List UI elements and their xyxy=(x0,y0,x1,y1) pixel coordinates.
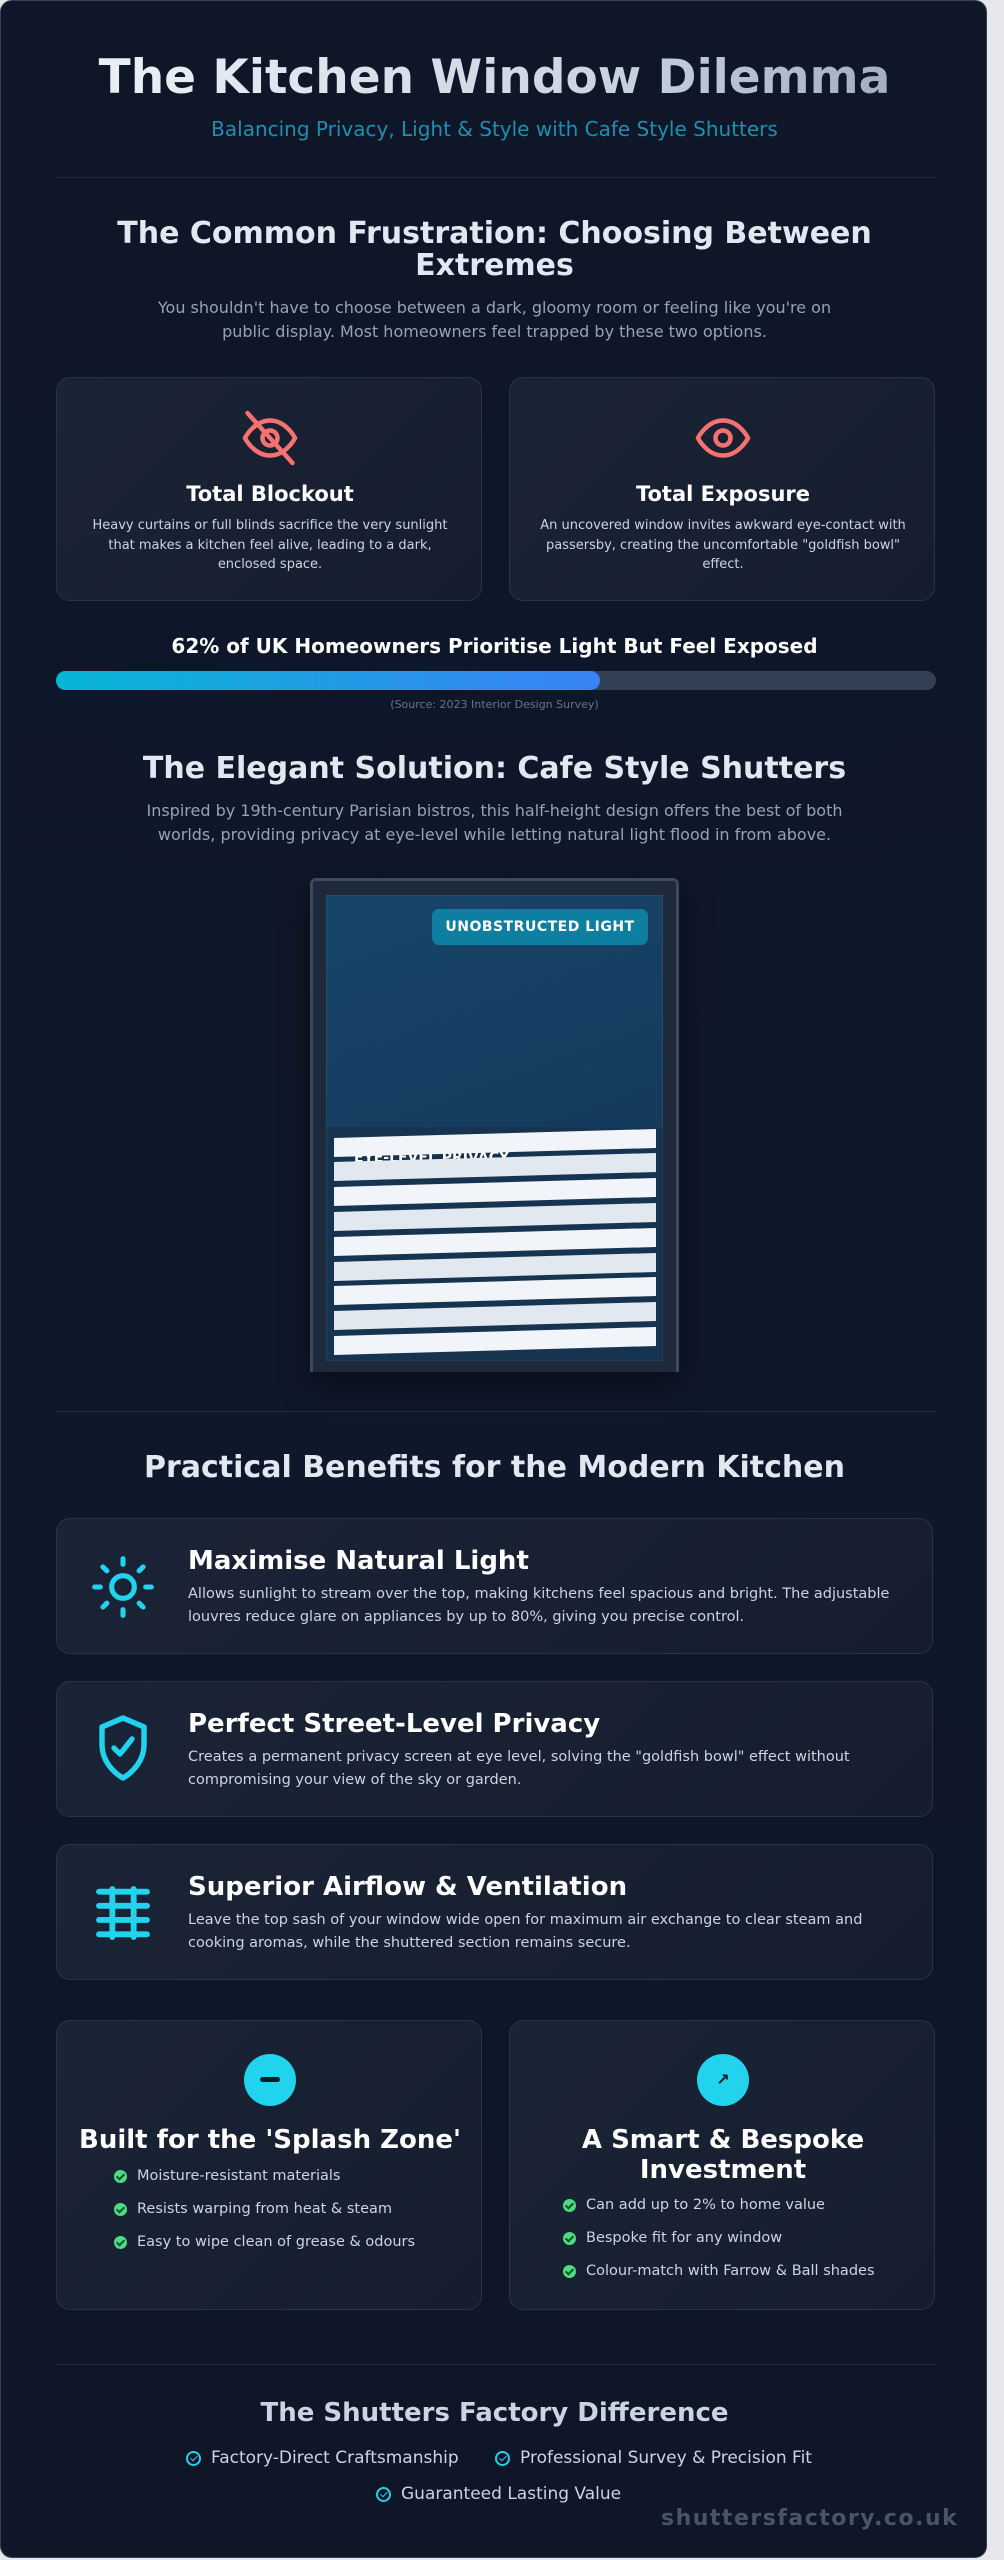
heading: common frustration: The Common Frustration: Choosing Between Extremes xyxy=(117,216,872,283)
checklist: Moisture-resistant materials xyxy=(137,2168,340,2184)
icon: grille xyxy=(96,1886,150,1940)
intro paragraph: You shouldn't have to choose between a dark, gloomy room or feeling like you're on public display. Most homeowners feel trapped by these two options. xyxy=(158,298,831,341)
bottom pane: shutter louvres xyxy=(326,1126,663,1361)
benefit text: Leave the top sash of your window wide open for maximum air exchange to clear steam and cooking aromas, while the shuttered section remains secure. xyxy=(188,1912,862,1951)
panel: airflow xyxy=(56,1844,933,1980)
stat heading: 62% of UK Homeowners Prioritise Light But Feel Exposed xyxy=(171,634,818,658)
badge: unobstructed light: UNOBSTRUCTED LIGHT xyxy=(445,919,635,935)
benefit title: Maximise Natural Light xyxy=(188,1546,529,1576)
bottom pane: shutter louvres: EYE-LEVEL PRIVACY xyxy=(354,1150,510,1166)
panel: total exposure xyxy=(509,377,935,601)
card text: An uncovered window invites awkward eye-contact with passersby, creating the uncomfortable "goldfish bowl" effect. xyxy=(540,518,906,572)
checklist: Resists warping from heat & steam xyxy=(137,2201,392,2217)
icon: investment circle xyxy=(697,2054,749,2106)
icon: splash circle xyxy=(244,2054,296,2106)
heading: elegant solution: The Elegant Solution: Cafe Style Shutters xyxy=(143,751,846,786)
icon: sun xyxy=(92,1556,154,1618)
checklist xyxy=(563,2197,874,2279)
checklist: Bespoke fit for any window xyxy=(586,2230,782,2246)
footer features xyxy=(186,2448,812,2504)
window illustration xyxy=(310,878,679,1372)
panel: street-level privacy xyxy=(56,1681,933,1817)
footer features: Guaranteed Lasting Value xyxy=(401,2484,621,2504)
badge: unobstructed light xyxy=(432,909,648,945)
bar fill 62% xyxy=(56,671,600,690)
source note: (Source: 2023 Interior Design Survey) xyxy=(390,698,599,711)
panel: bespoke investment xyxy=(509,2020,935,2310)
top pane: light xyxy=(326,895,663,1127)
card title: Total Blockout xyxy=(186,482,354,506)
title: The Kitchen Window Dilemma xyxy=(99,50,890,105)
benefit title: Superior Airflow & Ventilation xyxy=(188,1872,627,1902)
heading: practical benefits: Practical Benefits for the Modern Kitchen xyxy=(144,1450,845,1485)
brand: shuttersfactory.co.uk xyxy=(661,2506,958,2531)
icon: eye xyxy=(696,418,750,458)
checklist xyxy=(114,2168,415,2250)
footer heading: The Shutters Factory Difference xyxy=(260,2398,729,2428)
benefit text: Allows sunlight to stream over the top, making kitchens feel spacious and bright. The adjustable louvres reduce glare on appliances by up to 80%, giving you precise control. xyxy=(188,1586,889,1625)
card title: A Smart & Bespoke Investment xyxy=(582,2125,864,2185)
progress bar xyxy=(56,671,936,690)
panel: maximise natural light xyxy=(56,1518,933,1654)
subtitle: Balancing Privacy, Light & Style with Cafe Style Shutters xyxy=(211,117,778,141)
card title: Total Exposure xyxy=(636,482,810,506)
card text: Heavy curtains or full blinds sacrifice the very sunlight that makes a kitchen feel alive, leading to a dark, enclosed space. xyxy=(92,518,448,572)
card title: Built for the 'Splash Zone' xyxy=(79,2125,461,2155)
icon: investment circle: ↗ xyxy=(716,2070,730,2089)
icon: eye crossed xyxy=(242,410,298,466)
checklist: Easy to wipe clean of grease & odours xyxy=(137,2234,415,2250)
panel: total blockout xyxy=(56,377,482,601)
footer features: Professional Survey & Precision Fit xyxy=(520,2448,812,2468)
benefit text: Creates a permanent privacy screen at eye level, solving the "goldfish bowl" effect without compromising your view of the sky or garden. xyxy=(188,1749,850,1788)
solution paragraph: Inspired by 19th-century Parisian bistros, this half-height design offers the best of both worlds, providing privacy at eye-level while letting natural light flood in from above. xyxy=(146,801,842,844)
footer features: Factory-Direct Craftsmanship xyxy=(211,2448,459,2468)
icon: shield check xyxy=(99,1715,147,1781)
benefit title: Perfect Street-Level Privacy xyxy=(188,1709,600,1739)
checklist: Can add up to 2% to home value xyxy=(586,2197,825,2213)
checklist: Colour-match with Farrow & Ball shades xyxy=(586,2263,874,2279)
panel: splash zone xyxy=(56,2020,482,2310)
